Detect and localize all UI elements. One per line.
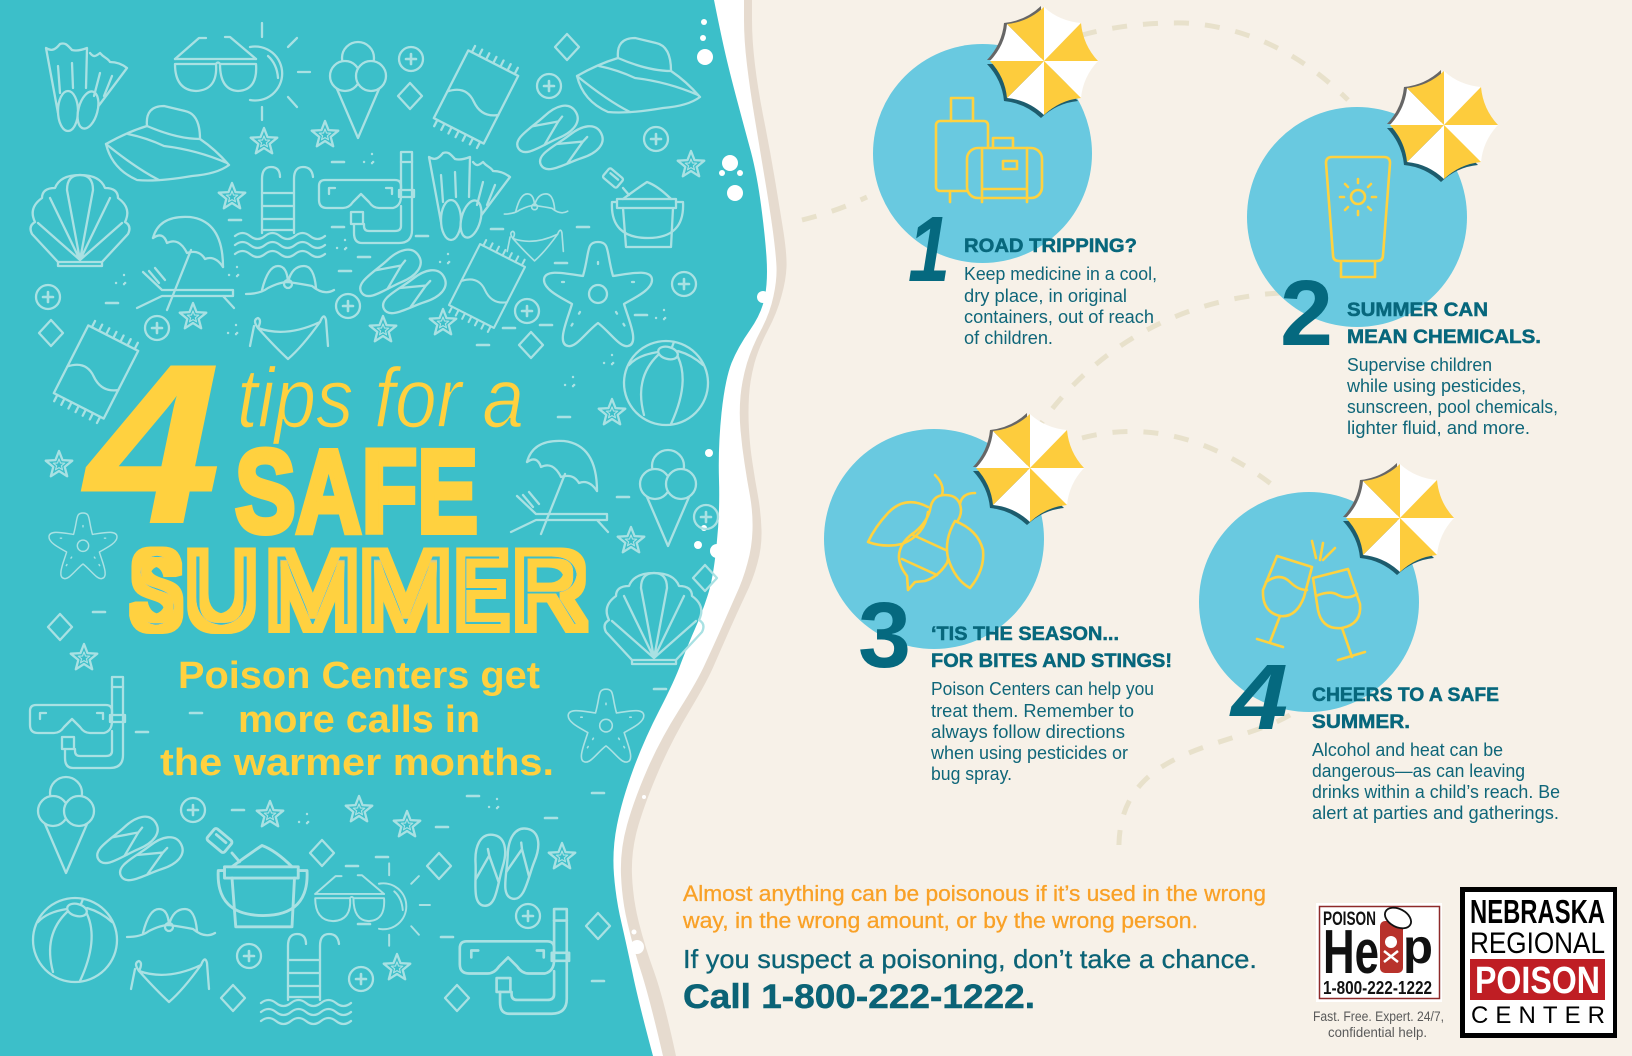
tip 1 circle [873,44,1092,263]
panel: tip 3 [824,413,1172,784]
title [82,317,587,650]
small stars, plus signs, diamonds and dashes [36,34,718,1011]
title: SUMMER: S [132,530,181,650]
icon: flip flops [511,100,608,177]
warning text [682,881,1266,933]
icon: sand bucket 2 [206,828,307,927]
tip 4 text: drinks within a child’s reach. Be [1312,782,1560,802]
tip 3 text: always follow directions [931,722,1125,742]
tip 3 text [930,679,1154,784]
logo: Poison Help [1316,903,1442,1002]
icon: towel 2 [446,238,528,334]
icon: ice cream [330,42,386,138]
logo: Nebraska Regional Poison Center: REGIONAL [1470,927,1605,960]
tip 4 heading: SUMMER. [1312,711,1410,733]
icon: seashell [31,175,129,266]
tip 4 text [1312,740,1560,823]
title: SUMMER: R [512,530,588,650]
tip 2 text: sunscreen, pool chemicals, [1347,397,1558,417]
icon: flip flops 4 [440,801,567,931]
icon: pool ladder 2 [261,934,351,1024]
tip 3 text: when using pesticides or [930,743,1128,763]
title: SUMMER [132,530,587,650]
logo: Poison Help: POISON [1323,909,1376,930]
logo: Nebraska Regional Poison Center [1460,887,1617,1038]
icon: sunglasses and sun 2 [315,863,430,946]
title: SAFE: SAFE [235,426,478,558]
subtitle [160,655,554,784]
tip 4 heading [1312,684,1499,733]
call to action: If you suspect a poisoning, don’t take a chance. [683,944,1257,974]
icon: seashell 2 [605,573,703,664]
icon: snorkel 2 [460,909,569,1014]
panel: teal water [0,0,767,1056]
panel: tip 1 [873,6,1157,348]
tip 4 heading: CHEERS TO A SAFE [1312,684,1499,706]
number 3: 3 [858,583,911,687]
title: SUMMER: M [359,530,452,650]
shoreline: sand band [0,0,787,1056]
logo: Nebraska Regional Poison Center: POISON [1475,960,1600,1002]
icon: sun hat 2 [106,106,229,180]
tip 2 text: Supervise children [1347,355,1492,375]
shoreline: white surf [0,0,777,1056]
icon: wine glasses [1257,541,1365,660]
icon: pool ladder [235,167,325,257]
icon: starfish 2 [49,513,117,579]
tip 2 circle [1247,107,1467,327]
tip 2 heading: MEAN CHEMICALS. [1347,326,1541,348]
icon: beach ball [624,341,708,425]
number 2: 2 [1280,261,1333,365]
logo caption: confidential help. [1328,1025,1427,1040]
icon: sun hat [577,38,700,112]
tip 3 text: Poison Centers can help you [931,679,1154,699]
icon: snorkel 3 [30,677,125,768]
icon: sunscreen tube [1326,157,1390,277]
icon: umbrella 4 [1343,463,1454,575]
tip 1 text: Keep medicine in a cool, [964,264,1157,284]
icon: umbrella 3 [973,413,1084,525]
dashed beach path [802,23,1348,853]
tip 3 heading: FOR BITES AND STINGS! [931,650,1172,672]
icon: snorkel [319,152,414,243]
title: SUMMER: U [186,530,258,650]
call to action [683,944,1257,1016]
panel: tip 2 [1247,70,1558,438]
logo: Poison Help: He [1323,918,1379,987]
icon: bee [868,475,983,590]
call to action: Call 1-800-222-1222. [683,978,1035,1016]
tip 3 text: treat them. Remember to [931,701,1134,721]
tip 1 text: containers, out of reach [964,307,1154,327]
icon: bikini 2 [246,266,334,359]
subtitle: the warmer months. [160,742,554,784]
icon: umbrella 2 [1387,70,1498,182]
title: SUMMER: M [265,530,360,650]
tip 2 text [1346,355,1558,438]
icon: beach lounger 2 [511,441,608,534]
logo caption: Fast. Free. Expert. 24/7, [1313,1009,1444,1024]
icon: ice cream 3 [38,777,94,873]
icon: bikini [504,194,568,261]
icon: towel 3 [51,319,141,425]
tip 2 text: while using pesticides, [1346,376,1526,396]
tip 1 text: dry place, in original [964,286,1127,306]
logo caption [1313,1009,1444,1040]
tip 4 text: dangerous—as can leaving [1312,761,1525,781]
tip 3 circle [824,429,1044,649]
tip 2 heading [1347,299,1541,348]
tip 1 heading: ROAD TRIPPING? [964,235,1137,257]
summer icon pattern [30,23,718,1024]
icon: flip flops 3 [91,811,188,888]
icon: starfish [544,242,652,346]
icon: bikini 3 [127,909,215,1002]
warning text: way, in the wrong amount, or by the wrong person. [682,908,1198,933]
title: SUMMER: E [456,530,507,650]
icon: sand bucket [602,168,683,247]
number 4: 4 [1229,645,1288,749]
panel: tip 4 [1199,463,1560,823]
tip 4 text: Alcohol and heat can be [1312,740,1503,760]
icon: flip flops 2 [354,244,451,321]
icon: beach lounger [137,217,234,310]
icon: sunglasses and sun [175,23,310,120]
logo: Poison Help: p [1403,921,1433,974]
icon: umbrella 1 [987,6,1098,118]
tip 3 heading [931,623,1172,672]
icon: towel [431,44,521,150]
title: tips for a: tips for a [237,351,524,445]
icon: swim fins 2 [429,152,510,240]
subtitle: Poison Centers get [178,655,540,697]
warning text: Almost anything can be poisonous if it’s used in the wrong [683,881,1266,906]
icon: swim fins [46,43,127,131]
tip 3 text: bug spray. [931,764,1012,784]
icon: starfish 3 [568,689,644,762]
foam bubbles [630,19,769,954]
icon: ice cream 2 [640,450,696,546]
icon: beach ball 2 [33,898,117,982]
subtitle: more calls in [238,699,480,741]
tip 4 text: alert at parties and gatherings. [1312,803,1559,823]
tip 2 text: lighter fluid, and more. [1347,418,1530,438]
logo: Nebraska Regional Poison Center: CENTER [1471,1002,1605,1029]
tip 1 text: of children. [964,328,1053,348]
icon: suitcases [936,98,1042,202]
logo: Poison Help: 1-800-222-1222 [1323,978,1432,998]
tip 1 text [964,264,1157,348]
tip 3 heading: ‘TIS THE SEASON... [931,623,1119,645]
tip 4 circle [1199,492,1419,712]
title: big 4: 4 [82,317,220,570]
tip 2 heading: SUMMER CAN [1347,299,1488,321]
number 1: 1 [908,197,950,301]
